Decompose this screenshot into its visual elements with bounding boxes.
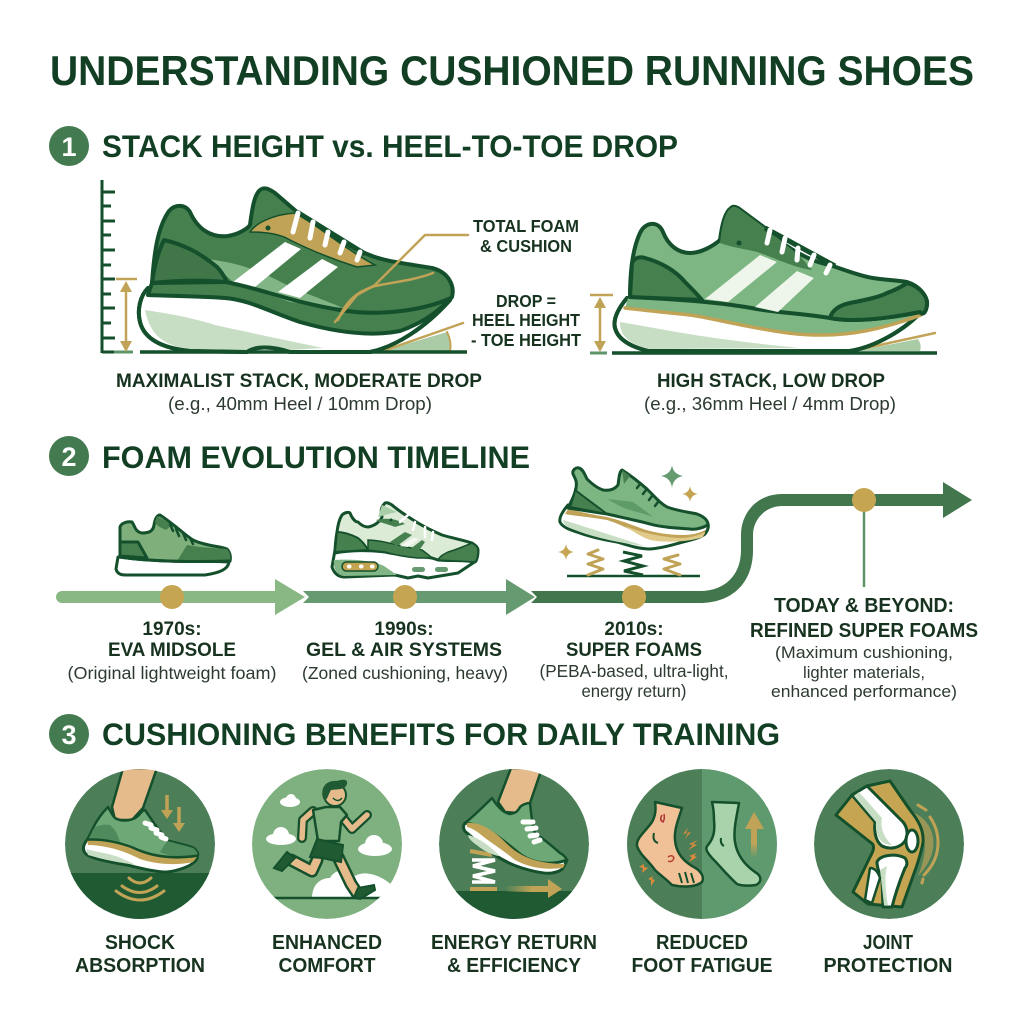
timeline label: today and beyond: lighter materials, [803,663,925,682]
title: UNDERSTANDING CUSHIONED RUNNING SHOES [50,47,974,94]
timeline label: 2010s [540,619,728,701]
callout: total foam and cushion: & CUSHION [480,236,572,256]
label: enhanced comfort: COMFORT [278,955,376,977]
label: shock absorption: SHOCK [105,932,176,954]
timeline label: 1990s: GEL & AIR SYSTEMS [306,640,502,661]
label: reduced foot fatigue: REDUCED [656,932,748,954]
timeline arrow: today and beyond [531,482,972,609]
icon: enhanced comfort runner [252,769,402,919]
label: energy return and efficiency [431,932,597,977]
shoe: 2010s super foam on springs [558,465,708,576]
timeline label: 1970s [68,619,276,683]
chart: height ruler [102,180,137,353]
timeline label: today and beyond: enhanced performance) [771,682,957,701]
icon: energy return [439,769,589,919]
timeline label: 2010s: 2010s: [604,619,664,640]
icon: reduced foot fatigue [627,769,777,919]
caption: maximalist stack [116,371,482,414]
section 3 heading: 3 [61,720,77,750]
label: shock absorption: ABSORPTION [75,955,205,977]
callout: drop formula [471,291,581,350]
caption: high stack low drop: (e.g., 36mm Heel / 4mm Drop) [644,393,896,414]
label: shock absorption [75,932,205,977]
timeline label: today and beyond [750,595,978,701]
caption: maximalist stack: (e.g., 40mm Heel / 10mm Drop) [168,393,432,414]
shoe: 1970s EVA [116,515,230,575]
toe drop wedge [383,323,463,351]
section 1 heading: STACK HEIGHT vs. HEEL-TO-TOE DROP [102,128,678,164]
icon: joint protection [814,769,964,919]
toe drop wedge: low drop shoe [857,333,935,351]
label: joint protection: PROTECTION [824,955,952,977]
timeline label: 2010s: SUPER FOAMS [566,640,702,661]
timeline arrow: 1990s [303,579,535,615]
section 1 heading: 1 [61,132,77,162]
label: joint protection: JOINT [863,932,913,954]
icon: shock absorption [60,768,220,923]
section 2 heading: 2 [61,442,77,472]
label: energy return and efficiency: ENERGY RETURN [431,932,597,954]
label: energy return and efficiency: & EFFICIENCY [447,955,582,977]
caption: high stack low drop [644,371,896,414]
timeline label: 1970s: 1970s: [142,619,202,640]
shoe: maximalist stack [139,188,467,352]
callout: drop formula: HEEL HEIGHT [472,310,580,330]
caption: maximalist stack: MAXIMALIST STACK, MODERATE DROP [116,371,482,392]
timeline label: 1970s: EVA MIDSOLE [108,640,236,661]
timeline label: today and beyond: (Maximum cushioning, [775,643,953,662]
callout: total foam and cushion [335,216,579,322]
label: joint protection [824,932,952,977]
section 2 heading: FOAM EVOLUTION TIMELINE [102,439,530,475]
callout: drop formula: - TOE HEIGHT [471,330,581,350]
shoe: 1990s gel and air [332,503,478,578]
timeline label: 2010s: (PEBA-based, ultra-light, [540,661,728,681]
timeline label: today and beyond: TODAY & BEYOND: [774,595,954,617]
callout: drop formula: DROP = [496,291,556,311]
label: reduced foot fatigue: FOOT FATIGUE [632,955,772,977]
timeline label: 1970s: (Original lightweight foam) [68,663,276,683]
label: enhanced comfort [272,932,382,977]
label: reduced foot fatigue [632,932,772,977]
callout: total foam and cushion: TOTAL FOAM [473,216,579,236]
label: enhanced comfort: ENHANCED [272,932,382,954]
height marker: low drop shoe [590,295,613,353]
section 3 heading: CUSHIONING BENEFITS FOR DAILY TRAINING [102,716,780,752]
timeline label: 1990s: (Zoned cushioning, heavy) [302,663,508,683]
caption: high stack low drop: HIGH STACK, LOW DROP [657,371,885,392]
shoe: high stack low drop [612,207,937,353]
timeline label: today and beyond: REFINED SUPER FOAMS [750,620,978,642]
timeline arrow: 1970s [56,579,305,615]
timeline label: 1990s [302,619,508,683]
timeline label: 1990s: 1990s: [374,619,434,640]
timeline label: 2010s: energy return) [582,681,686,701]
